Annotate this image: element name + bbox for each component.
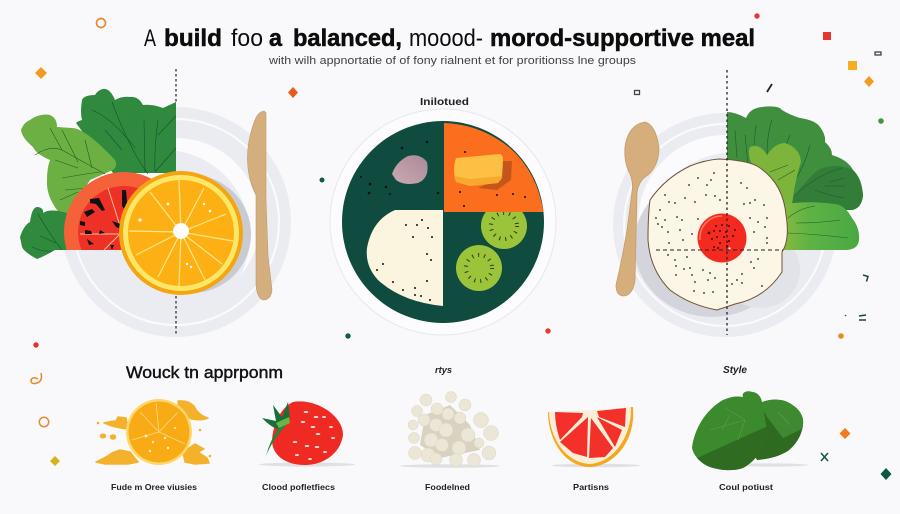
section heading: Wouck tn apprponm <box>126 363 283 382</box>
column heading: rtys: rtys <box>435 365 452 375</box>
center plate label: Inilotued <box>420 96 469 108</box>
kiwi lower <box>456 245 502 291</box>
icon: juicy orange <box>96 399 211 465</box>
title: moood- <box>409 25 483 52</box>
right greens <box>727 106 863 250</box>
title: build <box>164 25 222 52</box>
icon: grapefruit wedge <box>548 407 640 467</box>
left plate dotted divider <box>175 69 177 335</box>
right plate dotted cross <box>656 70 783 335</box>
subtitle: with wilh appnortatie of of fony rialnent et for proritionss lne groups <box>268 55 637 67</box>
label: beans: Foodelned <box>425 482 470 492</box>
red tomato centre <box>698 214 746 262</box>
quadrant: orange <box>444 123 544 212</box>
cream portion <box>367 210 443 306</box>
cheese <box>454 154 512 190</box>
title: morod-supportive meal <box>490 25 755 52</box>
orange slice <box>119 171 251 295</box>
left plate <box>61 107 291 337</box>
label: grapefruit: Partisns <box>573 482 609 492</box>
right plate <box>613 113 837 337</box>
plate specks <box>360 141 526 301</box>
title: balanced, <box>293 25 402 52</box>
knife <box>247 111 272 300</box>
spoon <box>616 122 659 296</box>
potato <box>392 155 428 184</box>
icon: strawberry <box>259 401 355 466</box>
tortilla seeds <box>655 172 768 294</box>
title: a <box>269 25 283 52</box>
title <box>144 25 755 52</box>
label: orange: Fude m Oree viusies <box>111 482 197 492</box>
left greens <box>20 89 176 259</box>
tortilla <box>648 159 787 310</box>
title: foo <box>231 25 263 52</box>
icon: white beans <box>400 392 500 468</box>
title: A <box>144 25 156 52</box>
column heading: style: Style <box>723 365 747 376</box>
kiwi upper <box>481 212 527 249</box>
label: leaf: Coul potiust <box>719 482 773 492</box>
center plate <box>330 109 556 335</box>
icon: green leaf <box>692 391 808 470</box>
tomato slice <box>64 172 152 250</box>
label: strawberry: Clood pofletfiecs <box>262 482 335 492</box>
